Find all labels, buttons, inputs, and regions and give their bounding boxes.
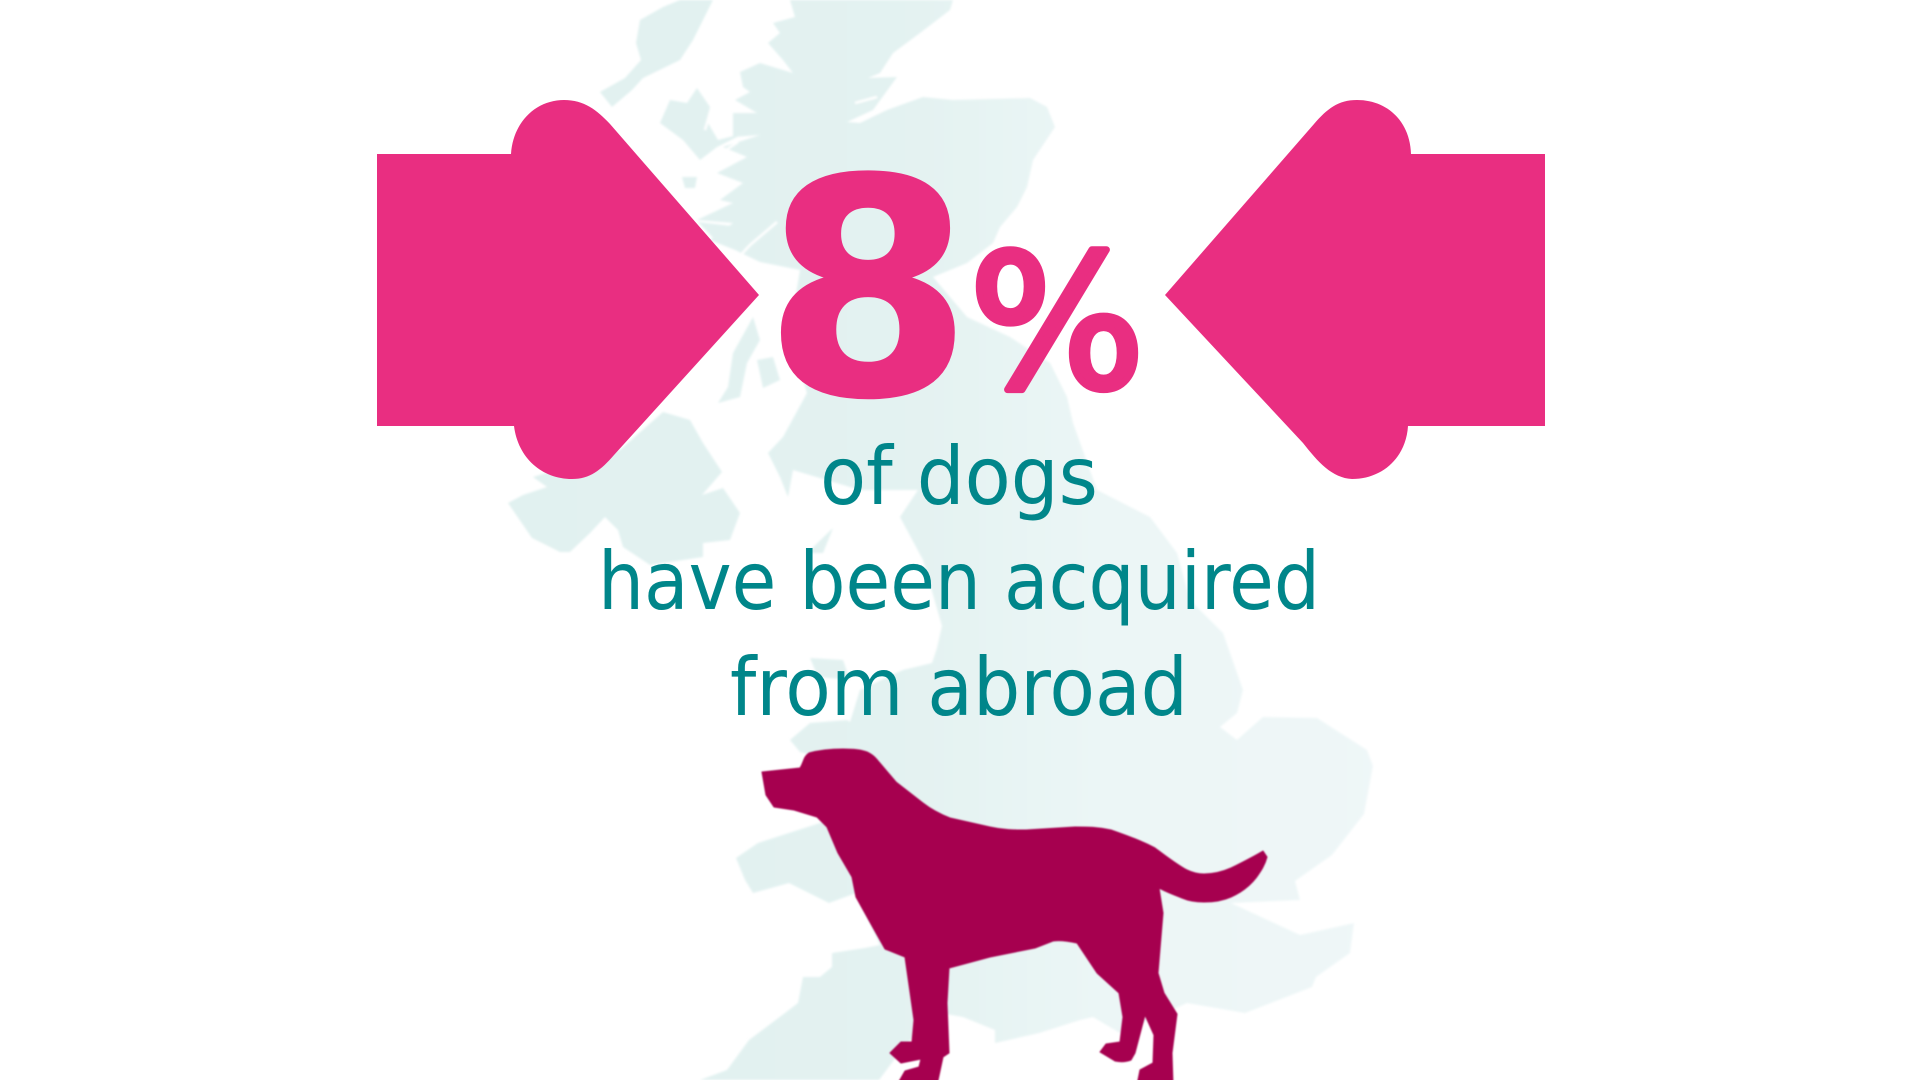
headline statistic: 8%: % (969, 215, 1145, 431)
caption text (598, 430, 1320, 734)
caption text: from abroad (730, 641, 1188, 734)
headline statistic: 8%: 8 (764, 116, 972, 465)
headline statistic: 8% (764, 116, 1145, 465)
icon: dog silhouette (762, 749, 1267, 1080)
right arrow pointing left (1165, 100, 1545, 479)
left arrow pointing right (377, 100, 759, 479)
background map of Great Britain and Northern Ireland (508, 0, 1373, 1080)
caption text: of dogs (820, 430, 1098, 523)
caption text: have been acquired (598, 535, 1320, 628)
